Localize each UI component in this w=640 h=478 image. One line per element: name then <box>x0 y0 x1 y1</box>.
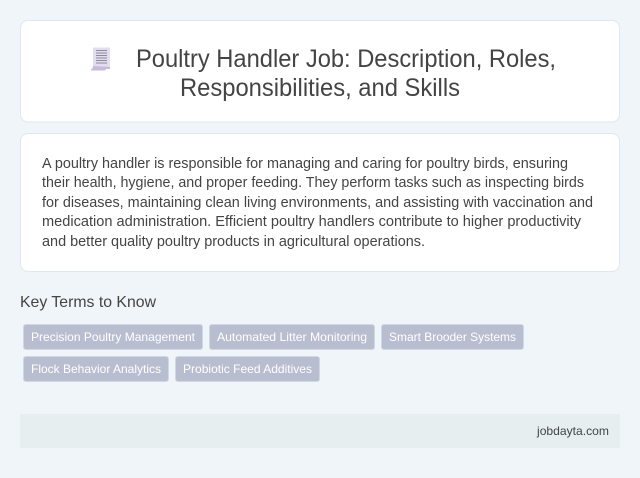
description text: for diseases, maintaining clean living environments, and assisting with vaccination and <box>42 195 593 211</box>
tag: precision poultry management: Precision Poultry Management <box>31 330 196 344</box>
description text: A poultry handler is responsible for managing and caring for poultry birds, ensuring <box>42 156 568 172</box>
title: Responsibilities, and Skills <box>180 74 460 102</box>
description text <box>42 156 593 250</box>
tag: automated litter monitoring: Automated Litter Monitoring <box>217 330 367 344</box>
tag: precision poultry management <box>24 324 202 350</box>
footer bar: jobdayta.com <box>536 424 609 438</box>
tag: flock behavior analytics: Flock Behavior Analytics <box>31 362 161 376</box>
tag: probiotic feed additives: Probiotic Feed Additives <box>183 362 312 376</box>
tag: flock behavior analytics <box>24 356 168 382</box>
description text: and better quality poultry products in agricultural operations. <box>42 234 425 250</box>
tag: automated litter monitoring <box>210 324 374 350</box>
tag: smart brooder systems <box>382 324 524 350</box>
title <box>136 45 556 102</box>
description text: medication administration. Efficient poultry handlers contribute to higher productivity <box>42 214 582 230</box>
footer bar <box>20 414 620 448</box>
icon: document scroll <box>91 47 110 70</box>
description text: their health, hygiene, and proper feeding. They perform tasks such as inspecting birds <box>42 175 584 191</box>
tag: smart brooder systems: Smart Brooder Systems <box>389 330 516 344</box>
title: Poultry Handler Job: Description, Roles, <box>136 45 556 73</box>
panel: description card <box>20 134 620 272</box>
tag: probiotic feed additives <box>176 356 320 382</box>
panel: title card <box>20 20 620 122</box>
heading: key terms: Key Terms to Know <box>20 294 156 311</box>
tag list <box>24 324 524 382</box>
